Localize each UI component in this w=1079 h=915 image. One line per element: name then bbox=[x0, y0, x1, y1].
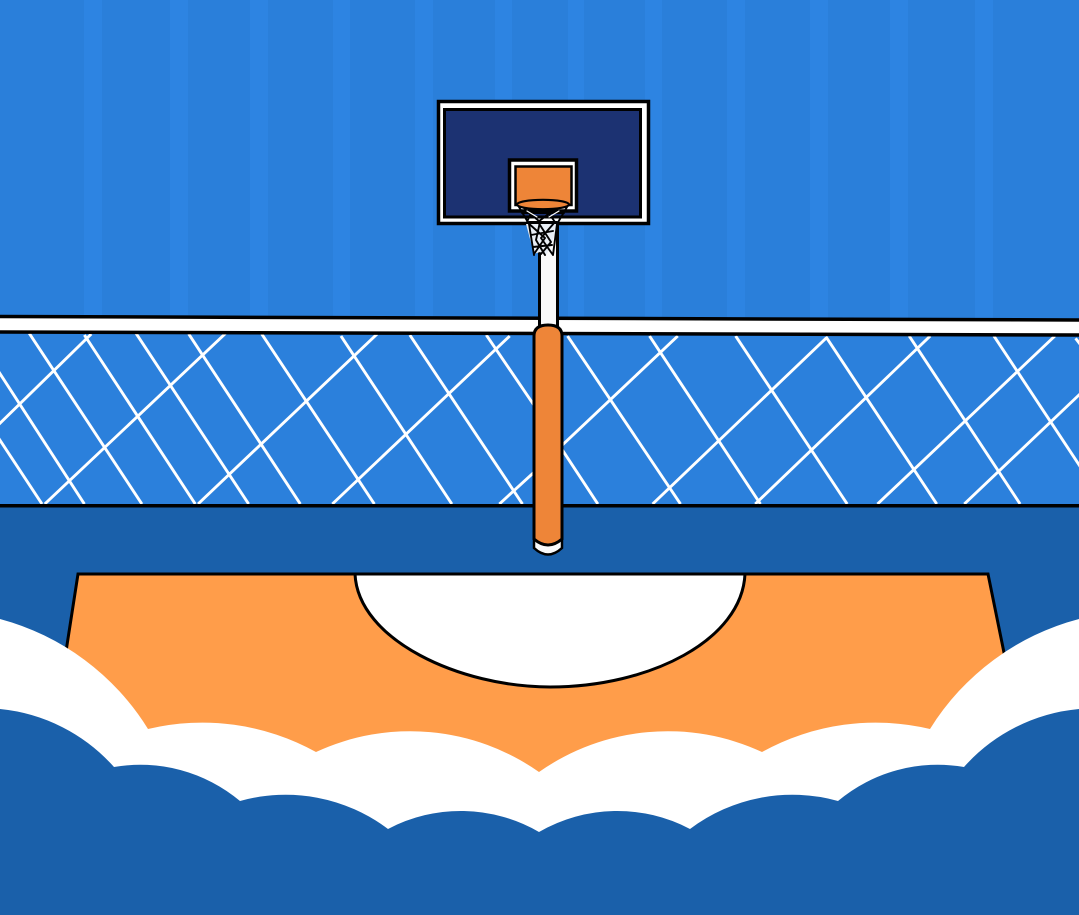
net bbox=[519, 207, 567, 256]
free throw semicircle bbox=[355, 574, 745, 687]
top rail of fence bbox=[0, 316, 1079, 335]
court paint area bbox=[43, 574, 1034, 800]
orange pole padding bbox=[534, 325, 562, 554]
basketball hoop bbox=[438, 102, 648, 554]
panel: chain link fence bbox=[0, 330, 1079, 506]
panel: floor bbox=[0, 504, 1079, 915]
blue cloud crowd layer bbox=[0, 709, 1079, 915]
shooter square bbox=[510, 160, 576, 211]
white upper pole bbox=[540, 215, 558, 330]
backboard bbox=[438, 102, 648, 224]
panel: blue wall bbox=[0, 0, 1079, 320]
white cloud crowd layer bbox=[0, 619, 1079, 915]
rim bbox=[517, 200, 569, 209]
